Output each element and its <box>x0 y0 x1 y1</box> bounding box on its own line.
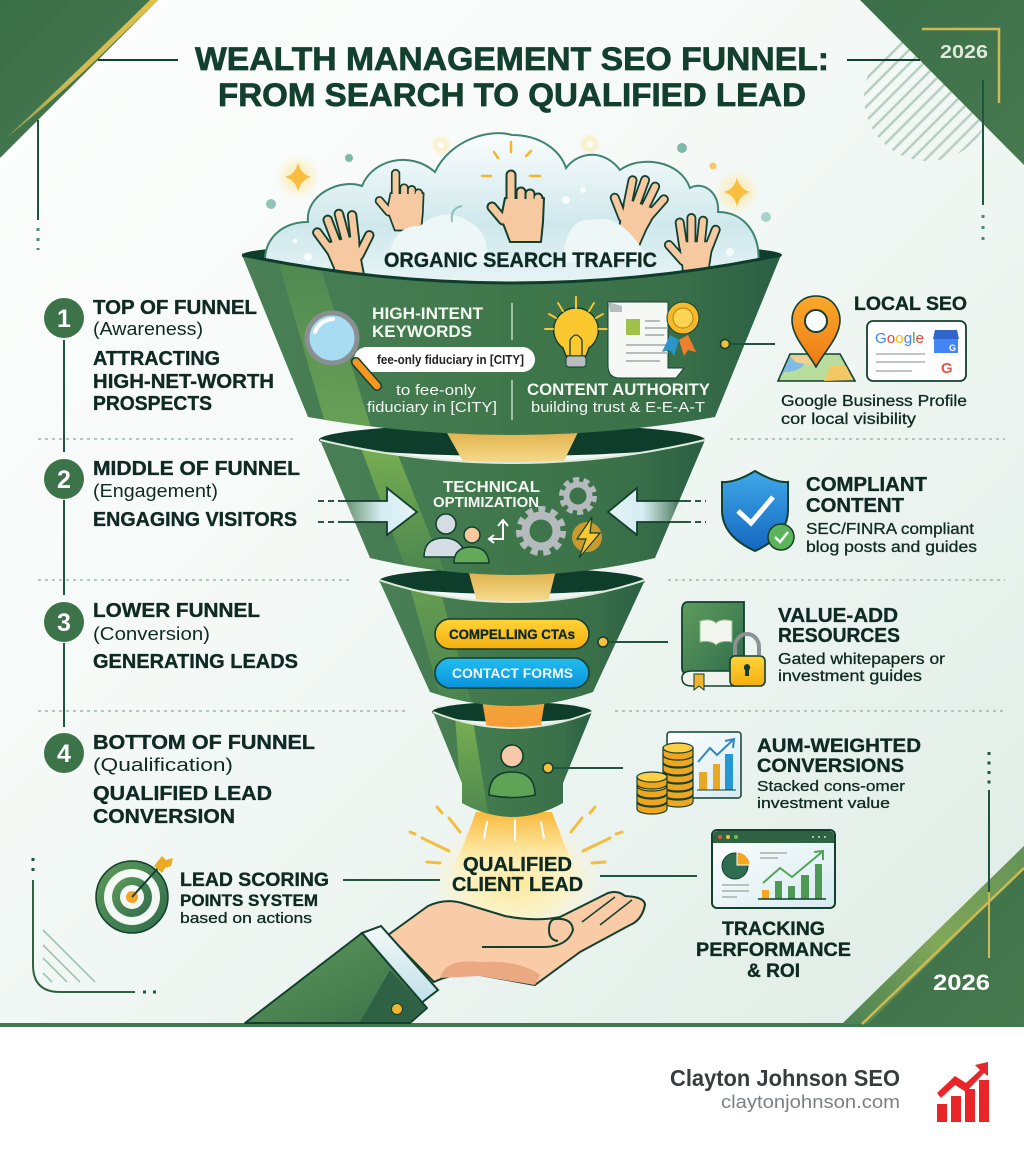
sparkles and dots <box>266 133 771 222</box>
text: stage 3 lower funnel <box>93 600 298 673</box>
content authority text: building trust & E-E-A-T <box>531 399 705 416</box>
tier 4 highlight band <box>455 720 488 814</box>
vertical separators <box>511 303 513 420</box>
compliant content text: COMPLIANT <box>806 474 927 496</box>
icon: shield <box>722 471 794 551</box>
optimization text <box>433 479 540 511</box>
keywords text: HIGH-INTENT <box>372 304 484 323</box>
connector dots <box>543 340 730 773</box>
google card <box>867 321 966 381</box>
aum-weighted text <box>757 736 921 812</box>
call to action button: COMPELLING CTAs <box>449 626 575 642</box>
aum-weighted text: CONVERSIONS <box>757 756 904 777</box>
stage timeline <box>44 298 84 773</box>
corner decoration: bottom right with year: 2026 <box>933 970 990 995</box>
icon: qualified person <box>489 745 535 798</box>
local seo description: Google Business Profile <box>781 393 967 410</box>
panel: aum-weighted conversions <box>637 732 921 814</box>
title: WEALTH MANAGEMENT SEO FUNNEL: <box>195 41 829 77</box>
text: stage 4 bottom of funnel: BOTTOM OF FUNNEL <box>93 732 315 754</box>
brand text <box>670 1065 900 1112</box>
value-add resources text: Gated whitepapers or <box>778 651 945 668</box>
raised hands <box>379 172 668 259</box>
compliant content text: SEC/FINRA compliant <box>806 521 975 538</box>
local seo description: cor local visibility <box>781 411 916 428</box>
lead scoring text: POINTS SYSTEM <box>180 891 318 910</box>
badge 2: 2 <box>57 466 71 494</box>
badge 2 <box>44 459 84 499</box>
local seo description <box>781 393 967 428</box>
aum-weighted text: AUM-WEIGHTED <box>757 736 921 757</box>
text: stage 2 middle of funnel <box>93 458 300 531</box>
keywords subtext: to fee-only <box>396 382 477 399</box>
text: stage 4 bottom of funnel: QUALIFIED LEAD <box>93 783 272 805</box>
icon: users <box>424 514 489 563</box>
panel: tracking performance <box>696 830 851 982</box>
illustration: open hand receiving lead <box>245 892 645 1023</box>
corner decoration: top right with year: 2026 <box>940 42 988 62</box>
text: stage 1 top of funnel <box>93 297 274 415</box>
tier 3 body <box>379 580 645 706</box>
panel: local seo <box>778 294 967 428</box>
icon: coins and chart <box>637 732 741 814</box>
icon: book and lock <box>682 602 765 690</box>
icon: red growth chart <box>937 1062 989 1122</box>
text: stage 3 lower funnel: LOWER FUNNEL <box>93 600 260 622</box>
google card: G <box>941 360 953 377</box>
tier 3 highlight band <box>411 590 472 702</box>
footer brand <box>670 1062 989 1122</box>
compliant content text: blog posts and guides <box>806 539 977 556</box>
tracking text: PERFORMANCE <box>696 939 851 961</box>
panel: value-add resources <box>682 602 945 690</box>
value-add resources text: investment guides <box>778 668 922 685</box>
icon: light bulb <box>545 297 607 367</box>
keywords subtext: fiduciary in [CITY] <box>367 399 497 416</box>
keyword pill: fee-only fiduciary in [CITY] <box>377 352 524 367</box>
keywords subtext <box>367 382 497 416</box>
arrow: left inbound <box>318 488 417 535</box>
compliant content text: CONTENT <box>806 495 904 517</box>
cloud <box>265 133 759 300</box>
keywords text: KEYWORDS <box>372 322 472 341</box>
keyword pill <box>354 347 535 372</box>
value-add resources text <box>778 605 945 685</box>
contact forms button: CONTACT FORMS <box>452 665 573 681</box>
text: stage 4 bottom of funnel: (Qualification) <box>93 755 233 775</box>
text: stage 1 top of funnel: TOP OF FUNNEL <box>93 297 257 319</box>
optimization text: OPTIMIZATION <box>433 494 539 511</box>
icon: gears <box>519 480 594 553</box>
corner decoration: bottom right with year <box>842 752 1024 1024</box>
compliant content text <box>806 474 977 556</box>
keywords text <box>372 304 484 341</box>
qualified client lead label: CLIENT LEAD <box>452 874 583 896</box>
qualified client lead label: QUALIFIED <box>463 854 572 876</box>
sleeve shadow <box>360 970 426 1022</box>
text: stage 3 lower funnel: (Conversion) <box>93 624 210 644</box>
traffic label: ORGANIC SEARCH TRAFFIC <box>384 249 657 272</box>
lead scoring text: based on actions <box>180 910 312 927</box>
text: stage 1 top of funnel: (Awareness) <box>93 319 203 339</box>
content authority text: CONTENT AUTHORITY <box>527 380 711 399</box>
tier 4 rim and core <box>432 700 592 730</box>
call to action button <box>435 619 589 649</box>
tier 2 rim and core <box>319 424 705 465</box>
footer divider bar <box>0 1023 1024 1027</box>
value-add resources text: VALUE-ADD <box>778 605 898 627</box>
tier 4 body <box>433 712 592 817</box>
title: FROM SEARCH TO QUALIFIED LEAD <box>218 77 806 113</box>
panel: compliant content <box>722 471 977 556</box>
funnel tier 3 conversion <box>379 566 645 715</box>
corner decoration: top right with year <box>860 0 1024 240</box>
tracking text <box>696 918 851 982</box>
funnel tier 2 technical optimization <box>319 424 705 580</box>
inner cloud puffs <box>292 187 734 262</box>
aum-weighted text: investment value <box>757 795 890 812</box>
hand <box>388 892 645 985</box>
content authority text <box>527 380 711 416</box>
badge 1 <box>44 298 84 338</box>
cuff button <box>392 1004 402 1014</box>
aum-weighted text: Stacked cons-omer <box>757 778 905 795</box>
google card: Google <box>875 330 924 347</box>
icon: analytics dashboard <box>712 830 835 908</box>
corner decoration: top left <box>0 0 158 250</box>
icon: certificate document with rosette <box>608 302 699 378</box>
optimization text: TECHNICAL <box>443 479 540 496</box>
dotted stage dividers <box>38 439 1005 711</box>
sleeve <box>245 933 427 1023</box>
cuff <box>362 926 438 1004</box>
text: stage 2 middle of funnel: MIDDLE OF FUNNEL <box>93 458 300 480</box>
brand text: claytonjohnson.com <box>721 1092 900 1112</box>
icon: magnifying glass <box>307 313 377 386</box>
text: stage 2 middle of funnel: ENGAGING VISITORS <box>93 509 297 531</box>
text: stage 1 top of funnel: ATTRACTING <box>93 348 220 370</box>
tracking text: & ROI <box>747 960 800 982</box>
badge 3 <box>44 602 84 642</box>
icon: lightning bolt <box>572 517 602 558</box>
qualified client lead label <box>452 854 583 896</box>
lead scoring text: LEAD SCORING <box>180 870 329 891</box>
lower raised hands <box>314 142 716 298</box>
icon: workflow arrow <box>489 520 508 543</box>
funnel body 1 <box>242 255 781 435</box>
connector lines <box>343 344 775 880</box>
icon: target <box>96 856 173 933</box>
title <box>98 41 920 113</box>
text: stage 4 bottom of funnel: CONVERSION <box>93 806 235 828</box>
text: stage 4 bottom of funnel <box>93 732 315 828</box>
badge 4 <box>44 733 84 773</box>
badge 4: 4 <box>57 740 71 768</box>
local seo heading: LOCAL SEO <box>854 294 967 315</box>
text: stage 3 lower funnel: GENERATING LEADS <box>93 651 298 673</box>
google card: G <box>949 343 956 353</box>
text: stage 1 top of funnel: PROSPECTS <box>93 393 212 415</box>
tier 3 rim and core <box>379 566 645 602</box>
light beam and rays <box>410 807 622 940</box>
arrow: right inbound <box>608 488 706 535</box>
badge 1: 1 <box>57 305 71 333</box>
contact forms button <box>435 658 589 688</box>
corner decoration: bottom left <box>33 858 158 992</box>
brand text: Clayton Johnson SEO <box>670 1065 900 1091</box>
panel: lead scoring <box>96 856 329 933</box>
icon: map with pin <box>778 296 855 381</box>
badge 3: 3 <box>57 609 71 637</box>
funnel tier 1 with search traffic cloud <box>242 133 782 440</box>
value-add resources text: RESOURCES <box>778 625 900 647</box>
text: stage 1 top of funnel: HIGH-NET-WORTH <box>93 371 274 393</box>
funnel rim back <box>242 241 782 269</box>
tier 2 body <box>320 440 705 575</box>
funnel highlight band 1 <box>279 264 370 426</box>
funnel tier 4 qualification <box>432 700 592 825</box>
lead scoring text <box>180 870 329 927</box>
tier 2 highlight band <box>362 450 444 571</box>
text: stage 2 middle of funnel: (Engagement) <box>93 481 218 501</box>
tracking text: TRACKING <box>722 918 825 940</box>
